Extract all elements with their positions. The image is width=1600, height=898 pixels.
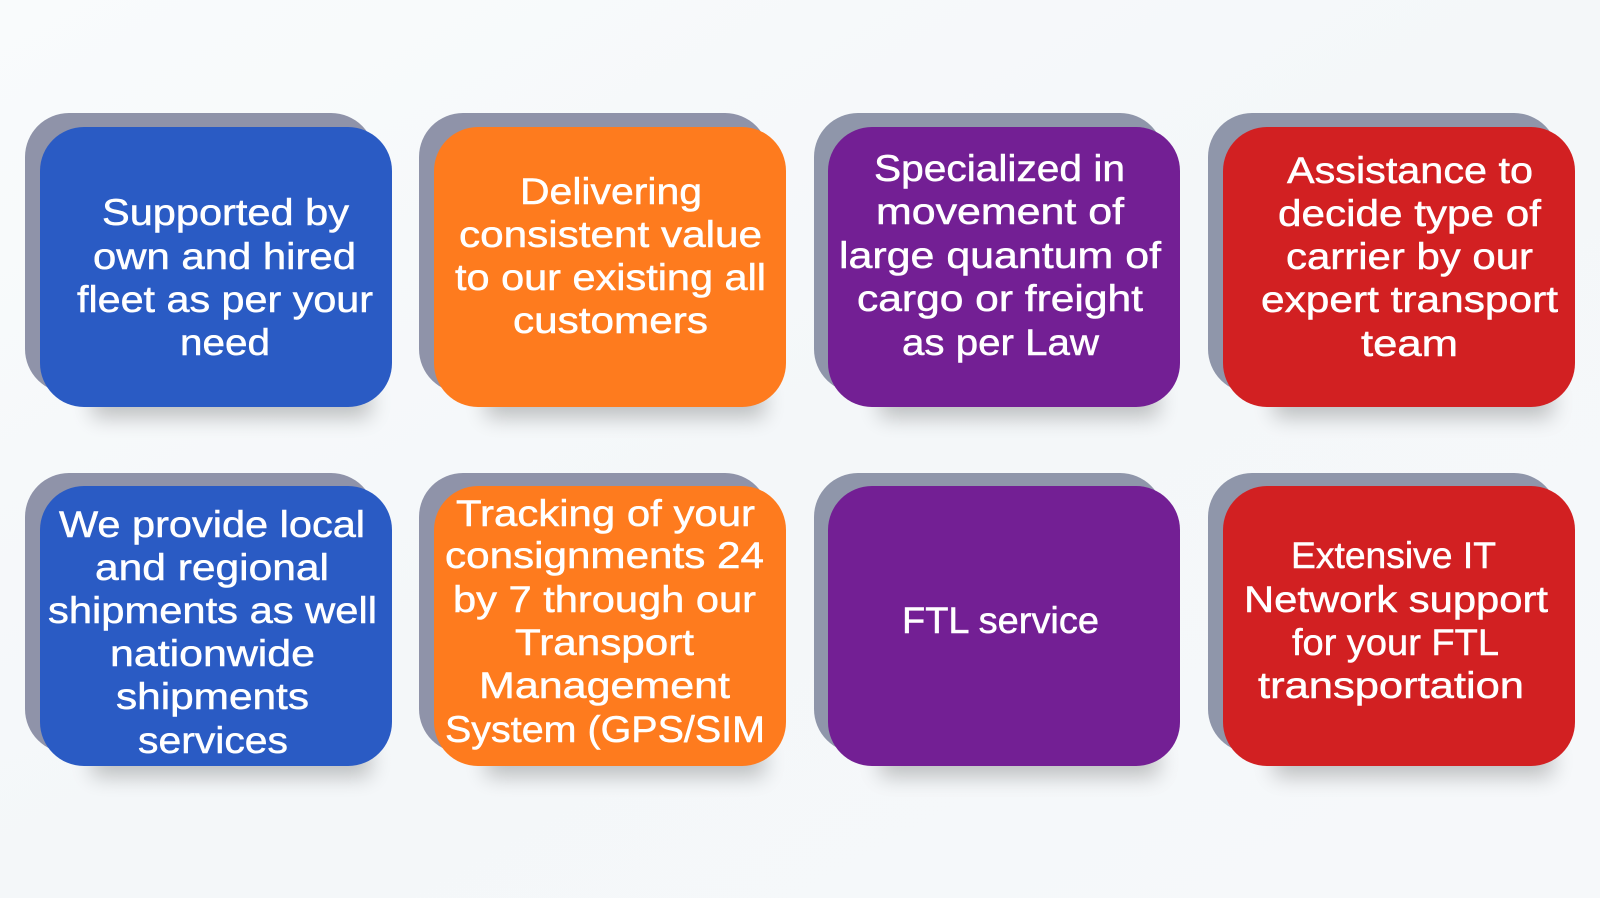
card 1 text: Supported by xyxy=(102,192,350,233)
card 4 text: decide type of xyxy=(1278,193,1542,234)
card 6: consignment tracking xyxy=(419,473,786,776)
card 4 front panel xyxy=(1223,127,1575,407)
card 8 text: for your FTL xyxy=(1292,622,1499,663)
card 7 front panel xyxy=(828,486,1180,766)
card 5 text: We provide local xyxy=(59,504,365,545)
card 6 text: System (GPS/SIM xyxy=(445,709,765,750)
card 5 text: services xyxy=(138,720,288,761)
card 1: fleet support xyxy=(25,113,392,417)
card 8: IT network support xyxy=(1208,473,1575,776)
card 1 backing panel xyxy=(25,113,375,393)
card 8 text: Network support xyxy=(1244,579,1549,620)
card 4 text: Assistance to xyxy=(1287,150,1533,191)
card 8 text: Extensive IT xyxy=(1291,535,1496,576)
card 2 text: consistent value xyxy=(459,214,762,255)
card 2 text: customers xyxy=(513,300,708,341)
card 4 backing panel xyxy=(1208,113,1558,393)
card 7 backing panel xyxy=(814,473,1164,753)
card 3 text: large quantum of xyxy=(839,235,1162,276)
card 6 text xyxy=(445,493,765,750)
card 1 text xyxy=(77,192,373,363)
card 7: FTL service xyxy=(814,473,1180,776)
card 8 backing panel xyxy=(1208,473,1558,753)
card 6 text: Transport xyxy=(515,622,695,663)
card 3: large cargo movement xyxy=(814,113,1180,417)
card 4 text: carrier by our xyxy=(1286,236,1533,277)
card 3 backing panel xyxy=(814,113,1164,393)
card 6 text: Management xyxy=(479,665,731,706)
card 1 text: fleet as per your xyxy=(77,279,373,320)
card 7 text: FTL service xyxy=(902,600,1099,641)
card 5 text: shipments as well xyxy=(48,590,377,631)
card 2 text: Delivering xyxy=(520,171,702,212)
card 5 front panel xyxy=(40,486,392,766)
card 4 text: expert transport xyxy=(1261,279,1559,320)
card 2 front panel xyxy=(434,127,786,407)
card 3 front panel xyxy=(828,127,1180,407)
card 6 text: Tracking of your xyxy=(456,493,755,534)
card 4 text: team xyxy=(1361,323,1458,364)
card 5 text: shipments xyxy=(116,676,309,717)
card 1 text: need xyxy=(180,322,270,363)
card 2 backing panel xyxy=(419,113,769,393)
card 1 text: own and hired xyxy=(93,236,356,277)
card 1 front panel xyxy=(40,127,392,407)
card 4 text xyxy=(1261,150,1559,364)
card 5 text: and regional xyxy=(95,547,329,588)
card 2 text: to our existing all xyxy=(455,257,766,298)
card 3 text: movement of xyxy=(876,191,1125,232)
card 4: carrier assistance xyxy=(1208,113,1575,417)
card 3 text: as per Law xyxy=(902,322,1099,363)
card 3 text: Specialized in xyxy=(874,148,1125,189)
card 6 backing panel xyxy=(419,473,769,753)
card 5 text xyxy=(48,504,377,761)
card 8 front panel xyxy=(1223,486,1575,766)
card 8 text: transportation xyxy=(1258,665,1524,706)
card 2: consistent value xyxy=(419,113,786,417)
card 5: local and nationwide shipments xyxy=(25,473,392,776)
card 5 text: nationwide xyxy=(110,633,315,674)
card 5 backing panel xyxy=(25,473,375,753)
card 3 text xyxy=(839,148,1162,363)
card 8 text xyxy=(1244,535,1549,706)
card 2 text xyxy=(455,171,766,341)
card 6 text: consignments 24 xyxy=(445,535,764,576)
card 3 text: cargo or freight xyxy=(857,278,1144,319)
card 6 text: by 7 through our xyxy=(453,579,756,620)
card 6 front panel xyxy=(434,486,786,766)
